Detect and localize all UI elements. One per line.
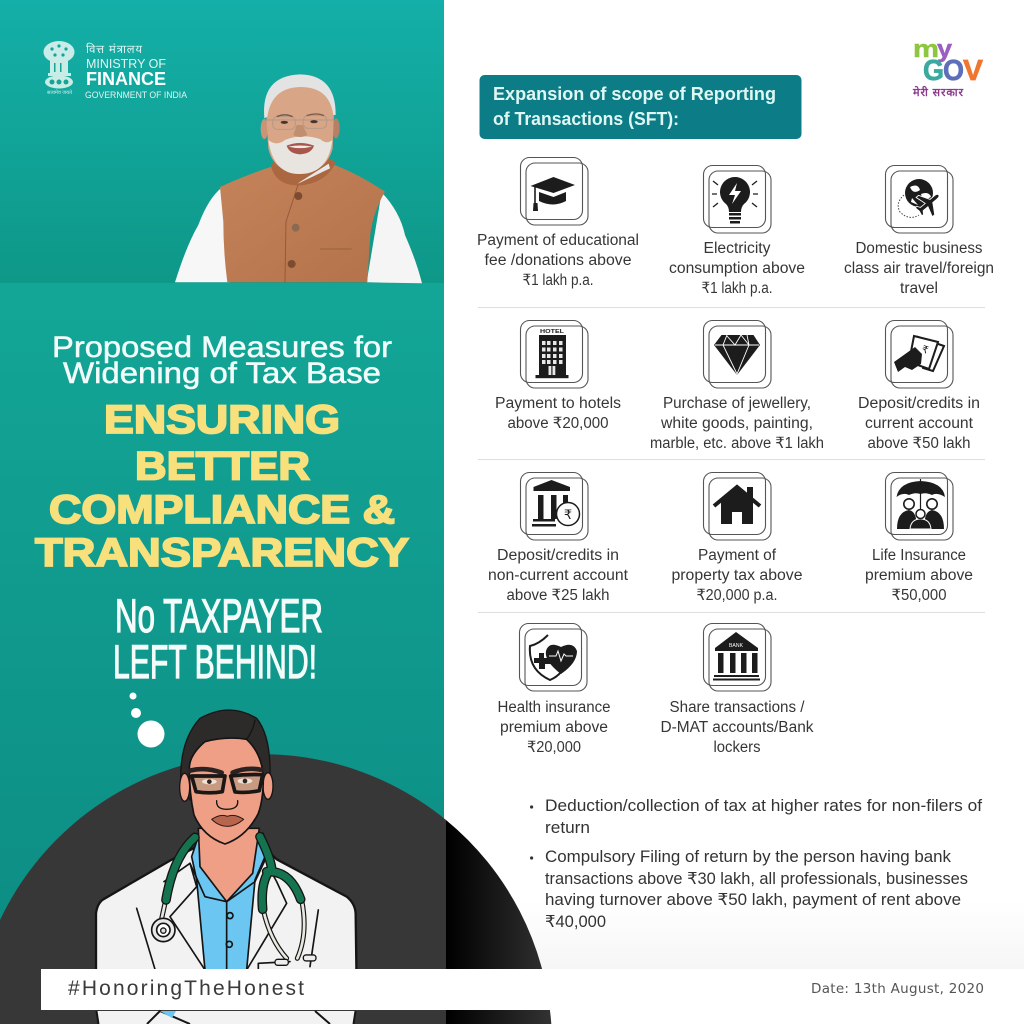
heading: proposed measures: [52, 331, 392, 390]
text: property tax label: ₹20,000 p.a.: [696, 587, 778, 604]
text: air travel label: Domestic business: [856, 240, 983, 257]
doctor eyebrows and glasses: [190, 769, 262, 773]
text: health insurance label: premium above: [500, 719, 608, 736]
text: share transactions label: D-MAT accounts/Bank: [660, 719, 814, 736]
text: life insurance label: premium above: [865, 567, 973, 584]
text: air travel label: [844, 240, 994, 297]
panel: lower teal background: [0, 283, 444, 1024]
text: electricity label: Electricity: [704, 240, 771, 257]
text: non-current label: Deposit/credits in: [497, 547, 619, 564]
coat lapels: [137, 863, 318, 970]
item: share transactions: [660, 624, 814, 756]
heading: proposed measures: Widening of Tax Base: [63, 357, 381, 390]
text: educational fee label: fee /donations above: [484, 252, 632, 269]
icon: hotel: HOTEL: [540, 329, 565, 335]
text: share transactions label: [660, 699, 814, 756]
text: handwritten slogan: [113, 589, 323, 688]
icon: umbrella and family: [886, 472, 953, 540]
item: air travel: [844, 166, 994, 297]
logo: MyGov: O: [943, 55, 964, 87]
text: current account label: above ₹50 lakh: [868, 435, 970, 452]
text: hotels label: above ₹20,000: [508, 415, 609, 432]
item: life insurance: [865, 472, 973, 604]
text: ministry name: MINISTRY OF: [86, 57, 166, 71]
bar: hashtag band: [41, 969, 1024, 1010]
panel: right white background: [444, 0, 1024, 1024]
text: life insurance label: [865, 547, 973, 604]
panel: top teal background: [0, 0, 444, 283]
text: bullet points: ₹40,000: [545, 913, 606, 931]
text: current account label: current account: [865, 415, 974, 432]
dividers: [478, 308, 985, 612]
item: electricity: [669, 166, 805, 297]
icon: national emblem: सत्यमेव जयते: [47, 89, 72, 96]
icon: shield and heart: [520, 624, 587, 691]
heading: expansion of scope: Expansion of scope of Reporting: [493, 84, 776, 104]
icon: house: [704, 472, 771, 540]
icon: graduation cap: [520, 158, 588, 225]
heading: ensuring better compliance and transparency: TRANSPARENCY: [35, 531, 409, 575]
logo: MyGov: G: [923, 55, 944, 87]
text: bullet points: transactions above ₹30 lakh, all professionals, businesses: [545, 870, 968, 888]
text: educational fee label: Payment of educational: [477, 232, 639, 249]
text: health insurance label: ₹20,000: [527, 739, 581, 756]
text: non-current label: [488, 547, 629, 604]
text: non-current label: non-current account: [488, 567, 629, 584]
logo: MyGov: [912, 36, 984, 99]
logo: MyGov: y: [937, 36, 953, 63]
icon: bank with rupee coin: [520, 472, 588, 540]
text: current account label: [858, 395, 980, 452]
text: ministry name: [85, 42, 188, 101]
heading: expansion of scope: [480, 75, 802, 139]
item: hotels: [495, 320, 621, 432]
text: current account label: Deposit/credits in: [858, 395, 980, 412]
text: jewellery label: Purchase of jewellery,: [663, 395, 811, 412]
heading: proposed measures: Proposed Measures for: [52, 331, 392, 364]
text: jewellery label: marble, etc. above ₹1 lakh: [650, 435, 824, 452]
text: air travel label: travel: [900, 280, 938, 297]
doctor shirt: [192, 833, 265, 970]
icon: bank building: [704, 624, 771, 691]
heading: expansion of scope: of Transactions (SFT):: [493, 109, 679, 129]
text: hashtag: #HonoringTheHonest: [68, 977, 304, 1000]
text: date: Date: 13th August, 2020: [811, 981, 984, 997]
text: educational fee label: [477, 232, 639, 289]
text: ministry name: FINANCE: [86, 69, 166, 89]
text: ministry name: वित्त मंत्रालय: [86, 42, 142, 56]
logo: Ministry of Finance: [44, 41, 188, 101]
text: share transactions label: Share transactions /: [670, 699, 805, 716]
text: hotels label: Payment to hotels: [495, 395, 621, 412]
text: bullet points: having turnover above ₹50 lakh, payment of rent above: [545, 891, 961, 909]
item: current account: [858, 320, 980, 452]
text: health insurance label: [498, 699, 610, 756]
icon: globe and plane: [886, 166, 953, 233]
text: educational fee label: ₹1 lakh p.a.: [522, 272, 594, 289]
text: non-current label: above ₹25 lakh: [506, 587, 610, 604]
icon: hand with notes: ₹: [920, 344, 930, 357]
text: ministry name: GOVERNMENT OF INDIA: [85, 90, 188, 101]
text: air travel label: class air travel/foreign: [844, 260, 994, 277]
text: electricity label: [669, 240, 805, 297]
dark circle behind doctor: [0, 754, 551, 1024]
portrait: minister in orange vest: [175, 74, 422, 283]
text: share transactions label: lockers: [714, 739, 761, 756]
text: handwritten slogan: No TAXPAYER: [115, 589, 323, 642]
item: educational fee: [477, 158, 639, 289]
icon: thought bubbles: [130, 692, 164, 748]
icon: light bulb: [704, 166, 771, 233]
icon: bank building: BANK: [729, 643, 743, 649]
text: life insurance label: ₹50,000: [892, 587, 947, 604]
icon: bank with rupee coin: ₹: [564, 507, 572, 522]
item: property tax: [672, 472, 802, 604]
text: electricity label: consumption above: [669, 260, 805, 277]
text: bullet points: Deduction/collection of tax at higher rates for non-filers of: [545, 797, 982, 815]
icon: diamond: [704, 320, 771, 388]
text: property tax label: Payment of: [698, 547, 777, 564]
logo: MyGov: मेरी सरकार: [912, 85, 964, 99]
doctor coat lower part: [96, 1011, 356, 1024]
heading: ensuring better compliance and transparency: [35, 398, 409, 575]
heading: ensuring better compliance and transparency: ENSURING: [104, 398, 340, 442]
text: bullet points: Compulsory Filing of return by the person having bank: [545, 848, 952, 866]
illustration: doctor with stethoscope: [96, 710, 357, 987]
heading: ensuring better compliance and transparency: BETTER: [135, 444, 310, 488]
doctor lips: [212, 815, 244, 826]
doctor coat: [96, 847, 357, 987]
doctor neck: [198, 828, 259, 902]
doctor head: [181, 710, 270, 800]
text: health insurance label: Health insurance: [498, 699, 610, 716]
text: property tax label: [672, 547, 802, 604]
text: jewellery label: white goods, painting,: [660, 415, 813, 432]
text: bullet points: return: [545, 819, 590, 837]
text: jewellery label: [650, 395, 824, 452]
stethoscope: [161, 900, 304, 958]
text: bullet points: [530, 797, 982, 931]
text: life insurance label: Life Insurance: [872, 547, 966, 564]
item: health insurance: [498, 624, 610, 756]
text: property tax label: property tax above: [672, 567, 802, 584]
text: handwritten slogan: LEFT BEHIND!: [113, 635, 317, 688]
text: hotels label: [495, 395, 621, 432]
item: non-current account: [488, 472, 629, 604]
item: jewellery: [650, 320, 824, 452]
logo: MyGov: V: [963, 55, 984, 87]
heading: ensuring better compliance and transparency: COMPLIANCE &: [49, 488, 395, 532]
icon: national emblem: [44, 41, 74, 96]
logo: MyGov: m: [913, 36, 939, 63]
text: electricity label: ₹1 lakh p.a.: [702, 280, 772, 297]
